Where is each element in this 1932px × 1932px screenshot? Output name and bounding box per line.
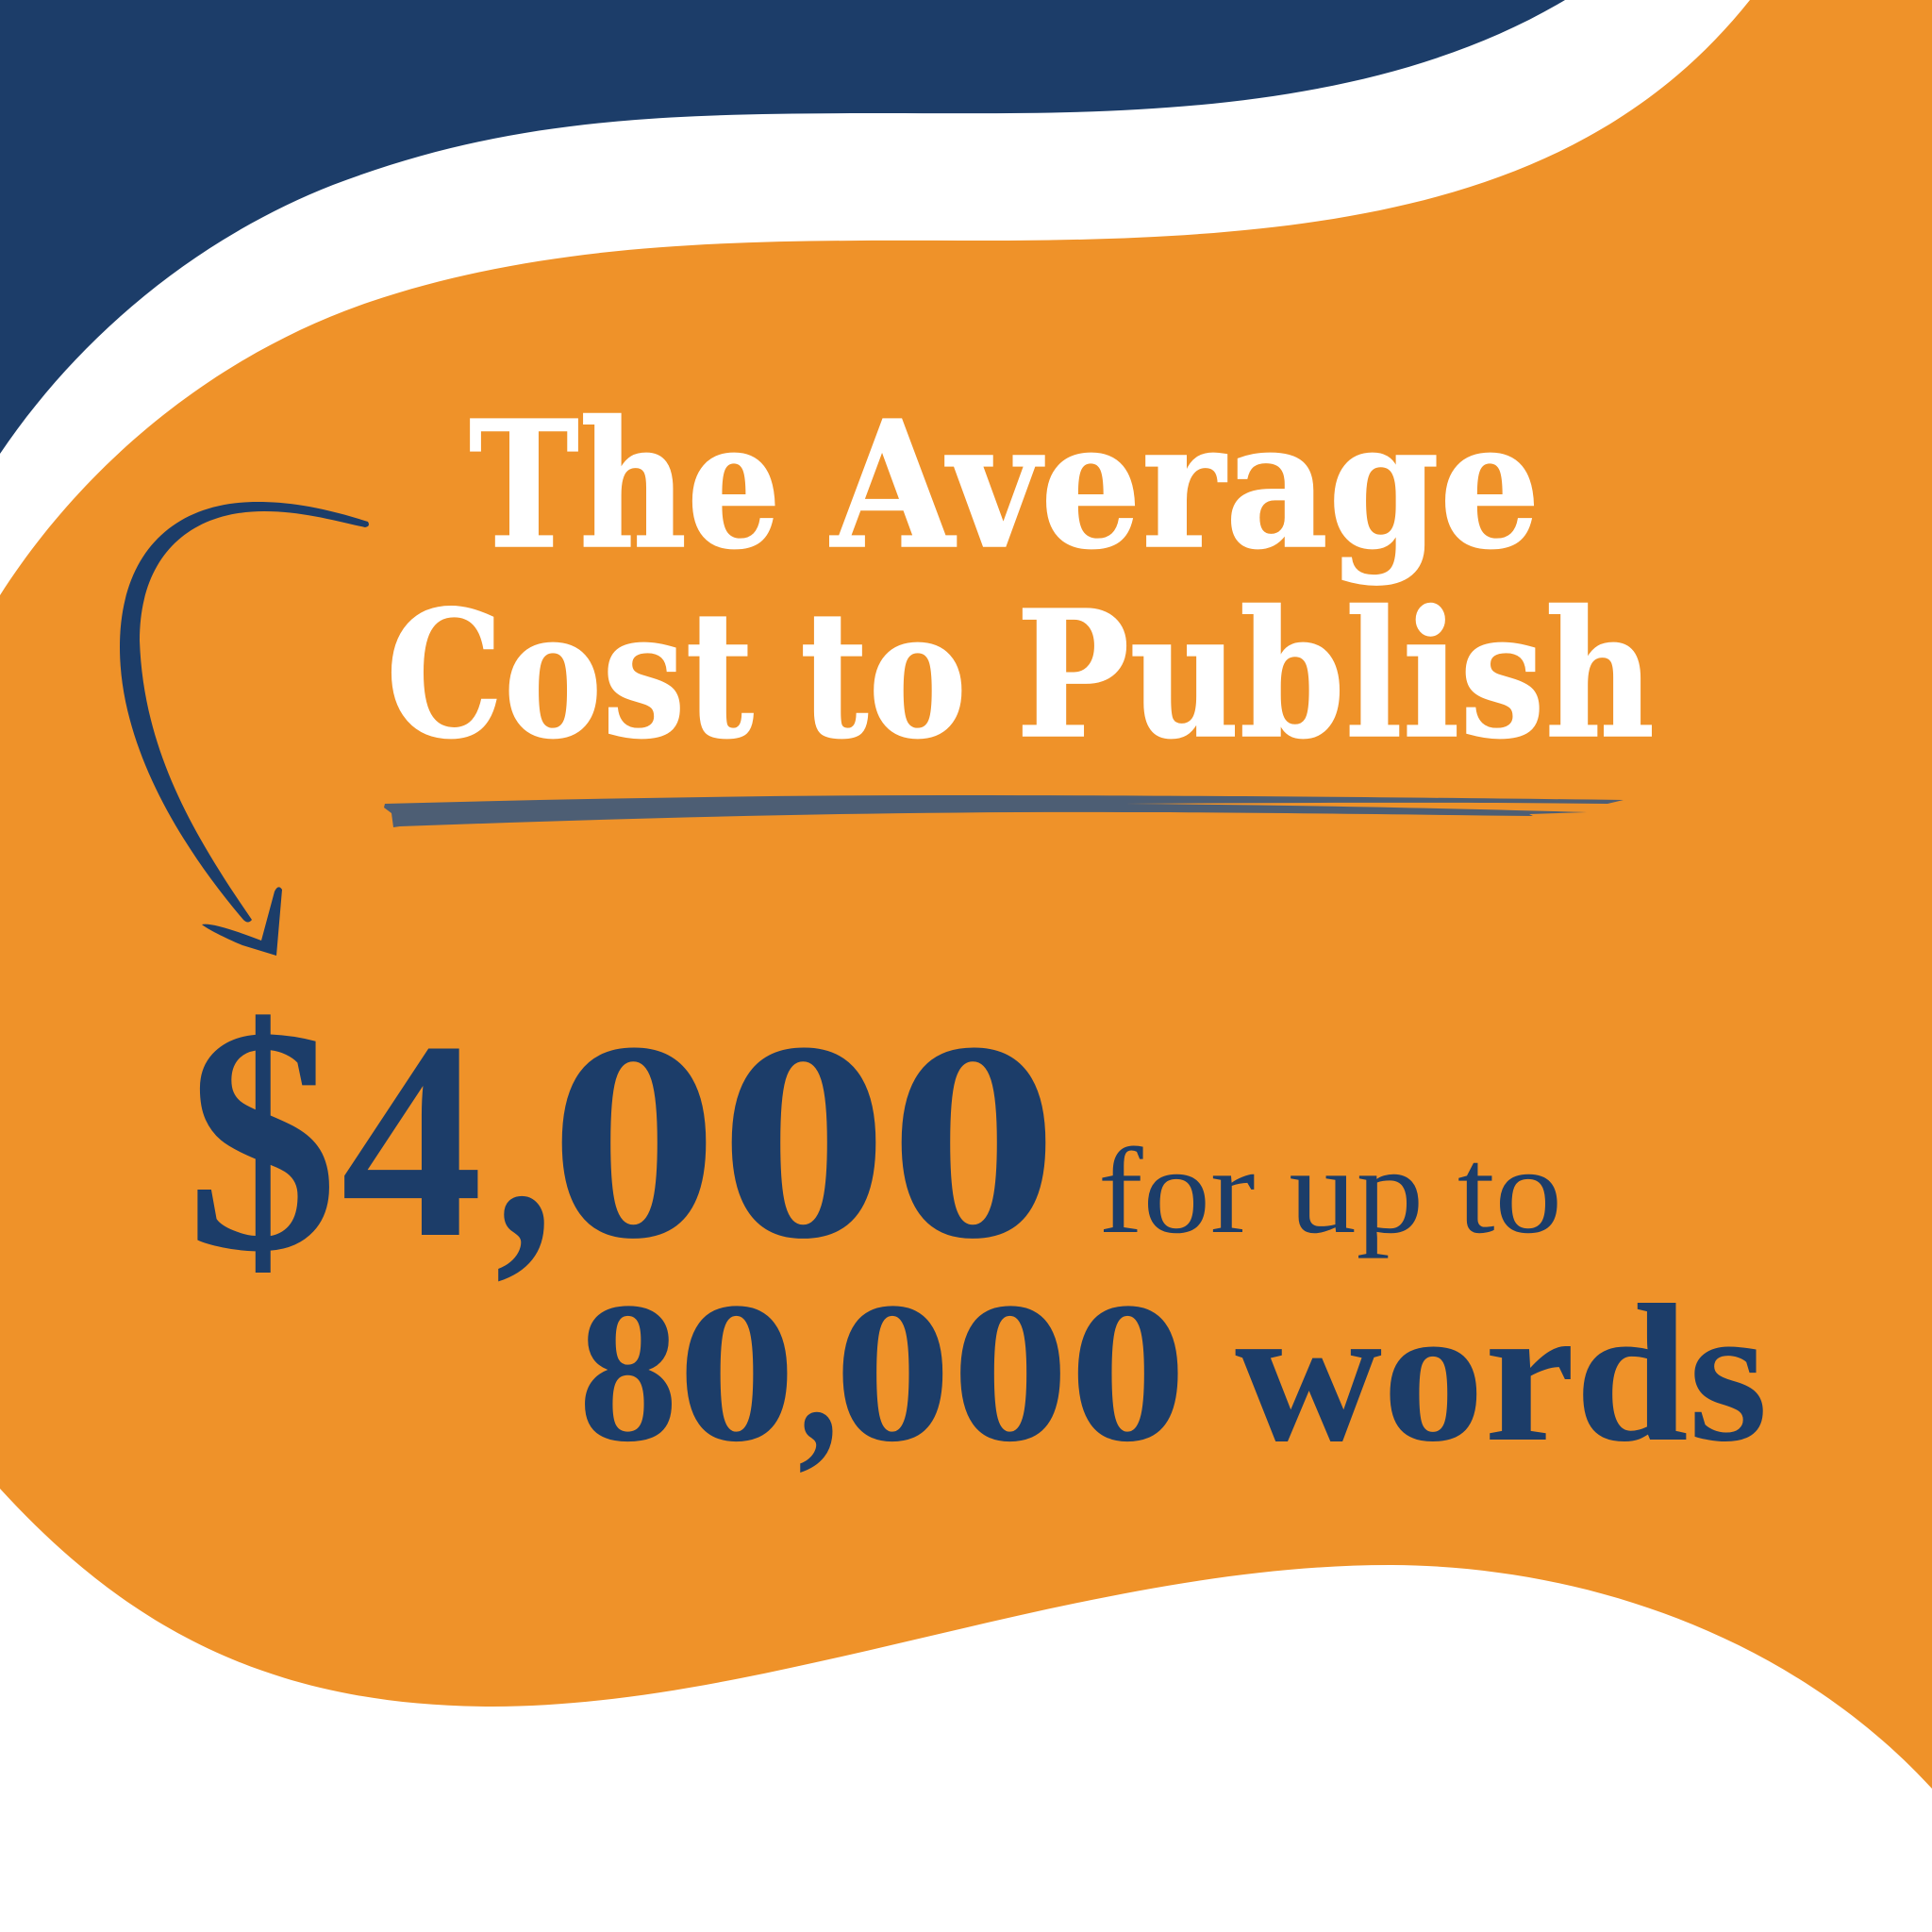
arrow shaft: [120, 502, 369, 923]
title: [386, 382, 1655, 777]
word count: 80,000: [578, 1261, 1187, 1486]
price: $4,000: 000: [549, 984, 1058, 1297]
curved arrow: [120, 502, 369, 956]
arrow head: [202, 887, 282, 956]
title: Cost: [386, 572, 754, 777]
word count: 80,000: 0: [677, 1261, 796, 1484]
text: for up to: for up to: [1098, 1124, 1562, 1259]
price: $4,000: $: [187, 960, 338, 1318]
title: to: [800, 572, 967, 777]
text: words: words: [1235, 1265, 1768, 1483]
word count: 80,000: ,: [798, 1263, 839, 1486]
word count: 80,000: 8: [578, 1261, 678, 1484]
brush stroke underline: [384, 795, 1624, 827]
title: Average: [829, 382, 1541, 588]
navy wave top: [0, 0, 1565, 454]
word count: 80,000: 000: [834, 1261, 1187, 1484]
price: $4,000: [187, 960, 1058, 1318]
price: $4,000: 4: [341, 983, 483, 1296]
price: $4,000: ,: [495, 986, 553, 1299]
title: The: [469, 382, 781, 588]
title: Publish: [1016, 572, 1655, 777]
